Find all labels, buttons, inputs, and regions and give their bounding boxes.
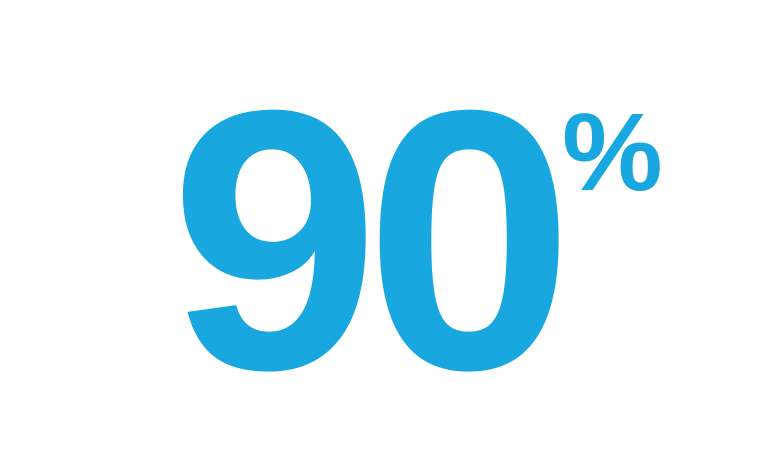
percent sign: % bbox=[562, 91, 663, 214]
big number: 90 bbox=[170, 34, 574, 447]
big number: 90: 9 bbox=[170, 34, 380, 447]
big number: 90: 0 bbox=[365, 34, 574, 447]
